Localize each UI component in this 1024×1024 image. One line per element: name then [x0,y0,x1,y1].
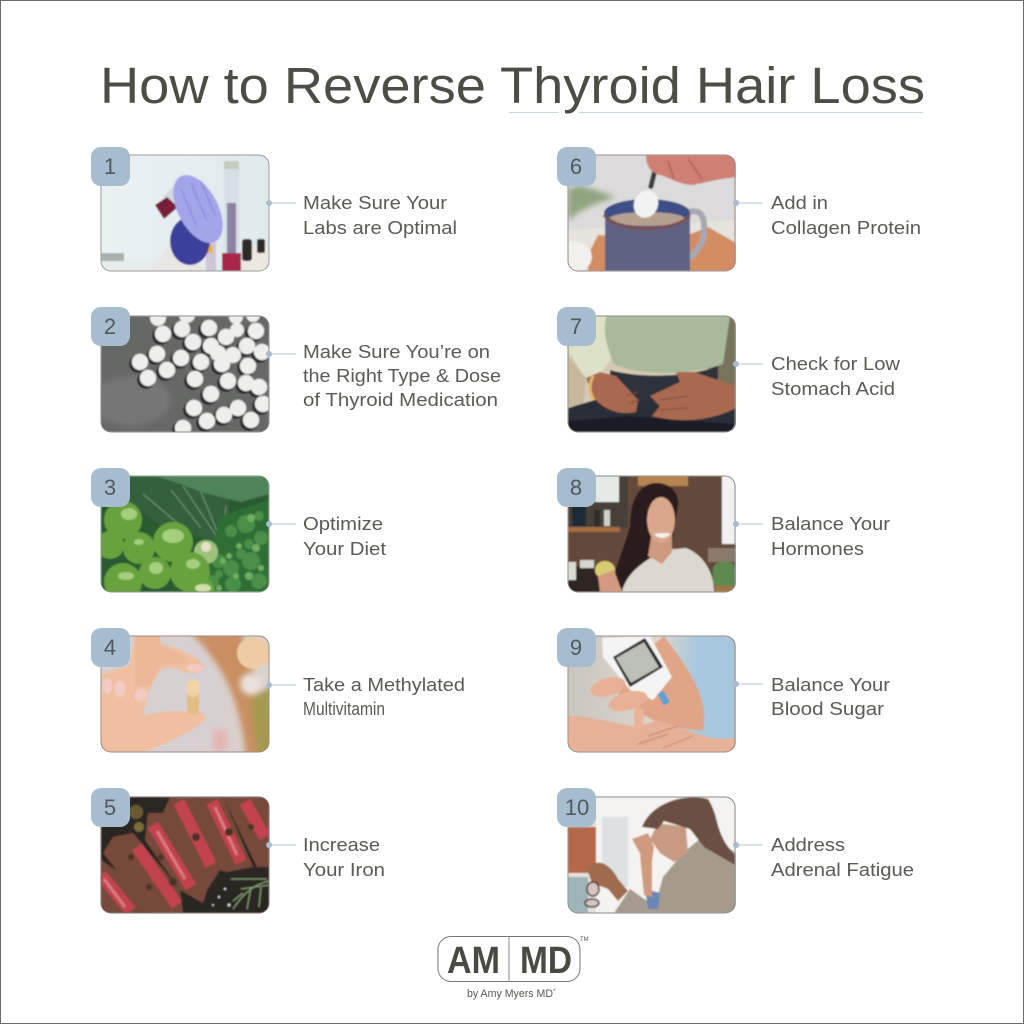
step 10: adrenal fatigue [557,788,914,913]
number badge 5 [91,788,130,827]
photo: hands on stomach [568,316,736,432]
label [771,192,921,238]
number badge 5: 5 [104,795,116,820]
step 3: diet [91,468,386,592]
photo: brussels sprouts and kale [102,476,268,592]
label: Blood Sugar [771,698,884,719]
connector [266,682,296,688]
number badge 7 [557,307,596,346]
frame [101,476,269,592]
number badge 4: 4 [104,635,116,660]
step 8: hormones [557,468,890,592]
number badge 8: 8 [570,475,582,500]
step 9: blood sugar [557,628,890,752]
logo: AM MD by Amy Myers MD: * [553,989,556,995]
step 1: labs [91,147,457,271]
logo: AM MD by Amy Myers MD [438,936,589,1000]
label: Check for Low [771,353,901,374]
label [771,834,914,880]
number badge 1: 1 [104,154,116,179]
number badge 10: 10 [565,795,589,820]
label: Labs are Optimal [303,217,457,238]
label: Stomach Acid [771,378,895,399]
logo: AM MD by Amy Myers MD: TM [580,937,589,943]
photo: tired woman holding glasses [568,797,736,913]
number badge 6 [557,147,596,186]
label: Your Diet [303,538,386,559]
photo: gloved hand holding blood vial [101,155,269,271]
label [303,192,457,238]
label: Collagen Protein [771,217,921,238]
label: Multivitamin [303,698,385,719]
number badge 1 [91,147,130,186]
label [303,674,465,719]
frame [568,797,735,913]
photo: glucose meter and finger [568,636,736,752]
step 5: iron [91,788,385,913]
connector [733,842,763,848]
number badge 6: 6 [570,154,582,179]
photo: white pills on grey stone [102,316,268,432]
label [303,834,385,880]
label: Your Iron [303,859,385,880]
label: Balance Your [771,513,890,534]
frame [568,316,735,432]
frame [101,797,269,913]
connector [733,200,763,206]
label [771,353,901,399]
label [303,341,501,410]
number badge 3 [91,468,130,507]
label: Make Sure You’re on [303,341,490,362]
number badge 4 [91,628,130,667]
photo: collagen spoon over mug [568,156,736,271]
label [771,513,890,559]
label: Adrenal Fatigue [771,859,914,880]
number badge 9 [557,628,596,667]
label: Balance Your [771,674,890,695]
connector [733,361,763,367]
connector [266,200,296,206]
frame [101,316,269,432]
number badge 2 [91,307,130,346]
frame [101,155,269,271]
label: the Right Type & Dose [303,365,501,386]
photo: smiling woman holding apple [568,476,736,592]
label: Optimize [303,513,383,534]
number badge 7: 7 [570,314,582,339]
connector [266,842,296,848]
label [303,513,386,559]
number badge 2: 2 [104,314,116,339]
frame [568,476,735,592]
logo: AM MD by Amy Myers MD: by Amy Myers MD [467,988,553,1000]
step 2: medication [91,307,501,439]
label: Address [771,834,845,855]
connector [266,521,296,527]
connector [733,681,763,687]
connector [266,351,296,357]
frame [101,636,269,752]
step 4: multivitamin [91,628,465,756]
number badge 8 [557,468,596,507]
step 7: stomach acid [557,307,901,432]
connector [733,521,763,527]
logo: AM MD by Amy Myers MD: MD [520,940,572,982]
label: Make Sure Your [303,192,447,213]
label: Take a Methylated [303,674,465,695]
label [771,674,890,719]
number badge 9: 9 [570,635,582,660]
label: Add in [771,192,828,213]
number badge 3: 3 [104,475,116,500]
photo: fingers holding capsule [102,636,268,752]
number badge 10 [557,788,596,827]
photo: sliced steak with rosemary [101,797,269,913]
label: Increase [303,834,380,855]
frame [568,636,735,752]
logo: AM MD by Amy Myers MD: AM [447,940,500,982]
step 6: collagen [552,147,921,273]
frame [568,155,735,271]
label: Hormones [771,538,864,559]
title: How to Reverse Thyroid Hair Loss [100,57,925,114]
label: of Thyroid Medication [303,389,498,410]
